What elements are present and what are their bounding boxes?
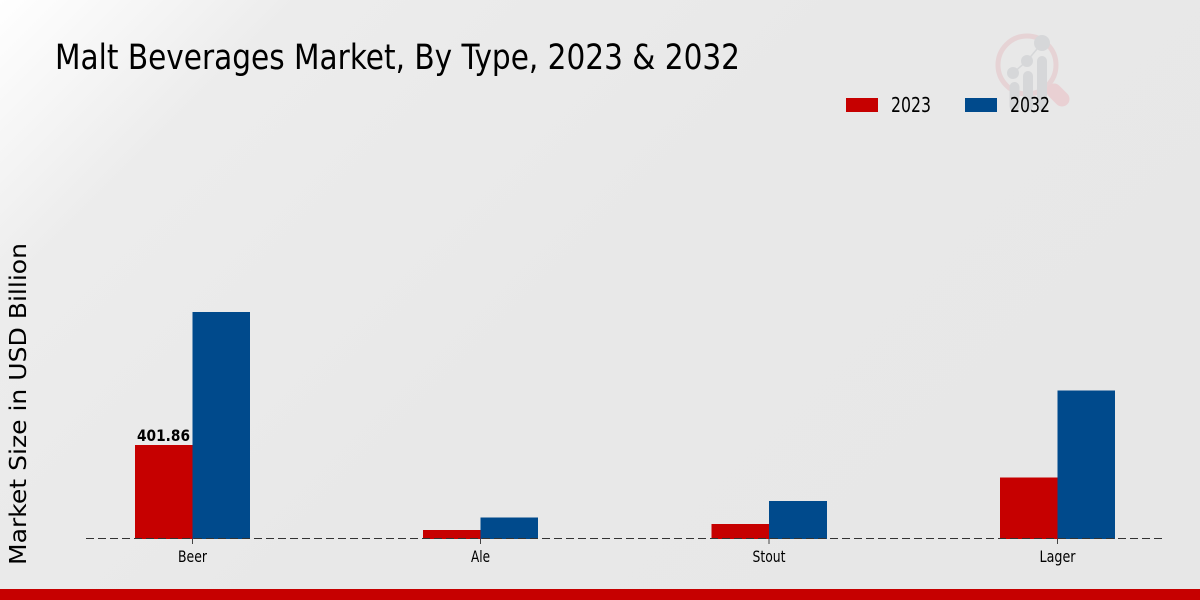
x axis labels: Stout [752,547,786,566]
legend: 2023 [846,93,931,117]
x axis labels: Ale [471,547,490,566]
y axis title: Market Size in USD Billion [6,243,32,565]
x axis labels: Beer [178,547,207,566]
x axis baseline [86,538,1164,544]
legend: 2032: 2032 [1010,93,1050,117]
group: Lager [1000,390,1115,539]
icon: watermark logo [998,35,1062,106]
footer bar [0,589,1200,600]
legend [846,93,1050,117]
x axis labels: Lager [1040,547,1076,566]
legend: 2032 [965,93,1050,117]
group: Beer: 401.86 [137,426,190,445]
title: Malt Beverages Market, By Type, 2023 & 2032 [55,38,740,78]
x axis labels [178,547,1076,566]
bar chart [86,312,1164,566]
legend: 2023: 2023 [891,93,931,117]
group: Beer [135,312,250,539]
group: Stout [712,501,827,539]
group: Ale [423,518,538,539]
